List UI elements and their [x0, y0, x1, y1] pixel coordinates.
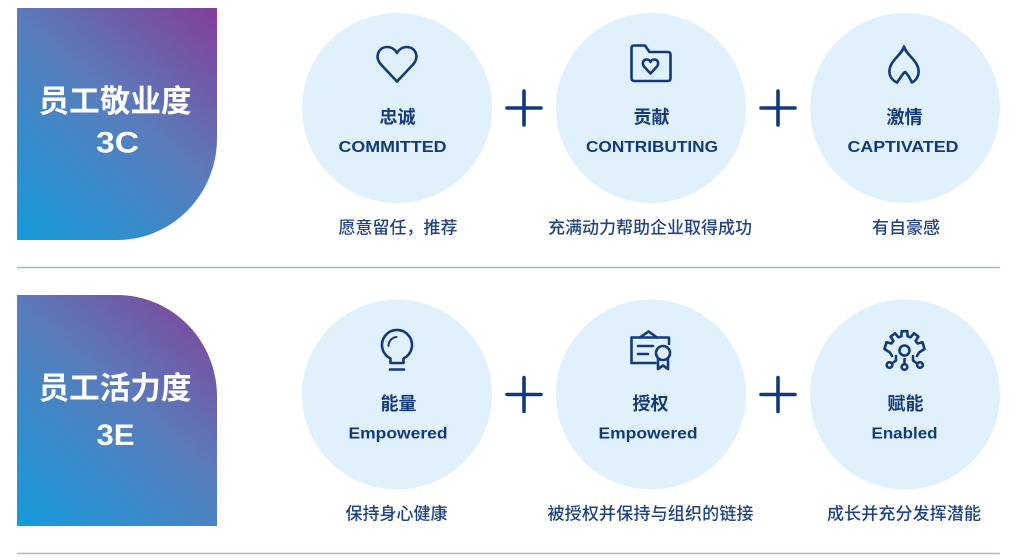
- heading: 3C: 3C: [96, 126, 139, 160]
- panel: captivated: [810, 13, 1000, 238]
- description: 保持身心健康: [346, 504, 448, 524]
- icon: light bulb: [382, 330, 412, 370]
- label: Empowered: Empowered: [348, 426, 448, 442]
- label: 激情: 激情: [886, 108, 922, 128]
- label: CAPTIVATED: CAPTIVATED: [848, 139, 958, 156]
- description: 成长并充分发挥潜能: [827, 504, 981, 524]
- label: COMMITTED: COMMITTED: [338, 139, 446, 156]
- description: 有自豪感: [872, 218, 940, 238]
- panel: 员工活力度 3E heading: [17, 295, 217, 526]
- heading: 3E: 3E: [96, 419, 134, 452]
- label: Empowered: Empowered: [598, 426, 698, 442]
- heading: 员工敬业度: 员工敬业度: [38, 84, 192, 119]
- icon: flame: [889, 46, 919, 82]
- description: 愿意留任，推荐: [338, 218, 458, 238]
- label: 赋能: 赋能: [888, 394, 924, 414]
- label: 授权: 授权: [632, 394, 668, 414]
- icon: plus: [761, 91, 795, 125]
- label: 忠诚: 忠诚: [380, 106, 416, 128]
- icon: plus: [507, 91, 541, 125]
- icon: certificate: [632, 332, 670, 369]
- panel: enabled: [810, 300, 1000, 524]
- label: 能量: 能量: [380, 394, 416, 414]
- panel: contributing: [548, 13, 752, 238]
- icon: gear with circuit nodes: [884, 331, 924, 370]
- panel: 员工敬业度 3C heading: [17, 8, 217, 240]
- icon: folder with heart: [632, 46, 670, 81]
- panel: committed: [302, 13, 492, 238]
- label: 贡献: 贡献: [634, 108, 670, 128]
- label: Enabled: Enabled: [872, 426, 938, 442]
- panel: empowered energy: [302, 300, 492, 524]
- icon: plus: [507, 378, 541, 412]
- heading: 员工活力度: 员工活力度: [38, 371, 192, 406]
- icon: heart: [378, 47, 416, 82]
- panel: empowered authorization: [548, 300, 754, 524]
- icon: plus: [761, 378, 795, 412]
- label: CONTRIBUTING: CONTRIBUTING: [586, 139, 718, 156]
- description: 充满动力帮助企业取得成功: [548, 218, 752, 238]
- description: 被授权并保持与组织的链接: [548, 504, 754, 524]
